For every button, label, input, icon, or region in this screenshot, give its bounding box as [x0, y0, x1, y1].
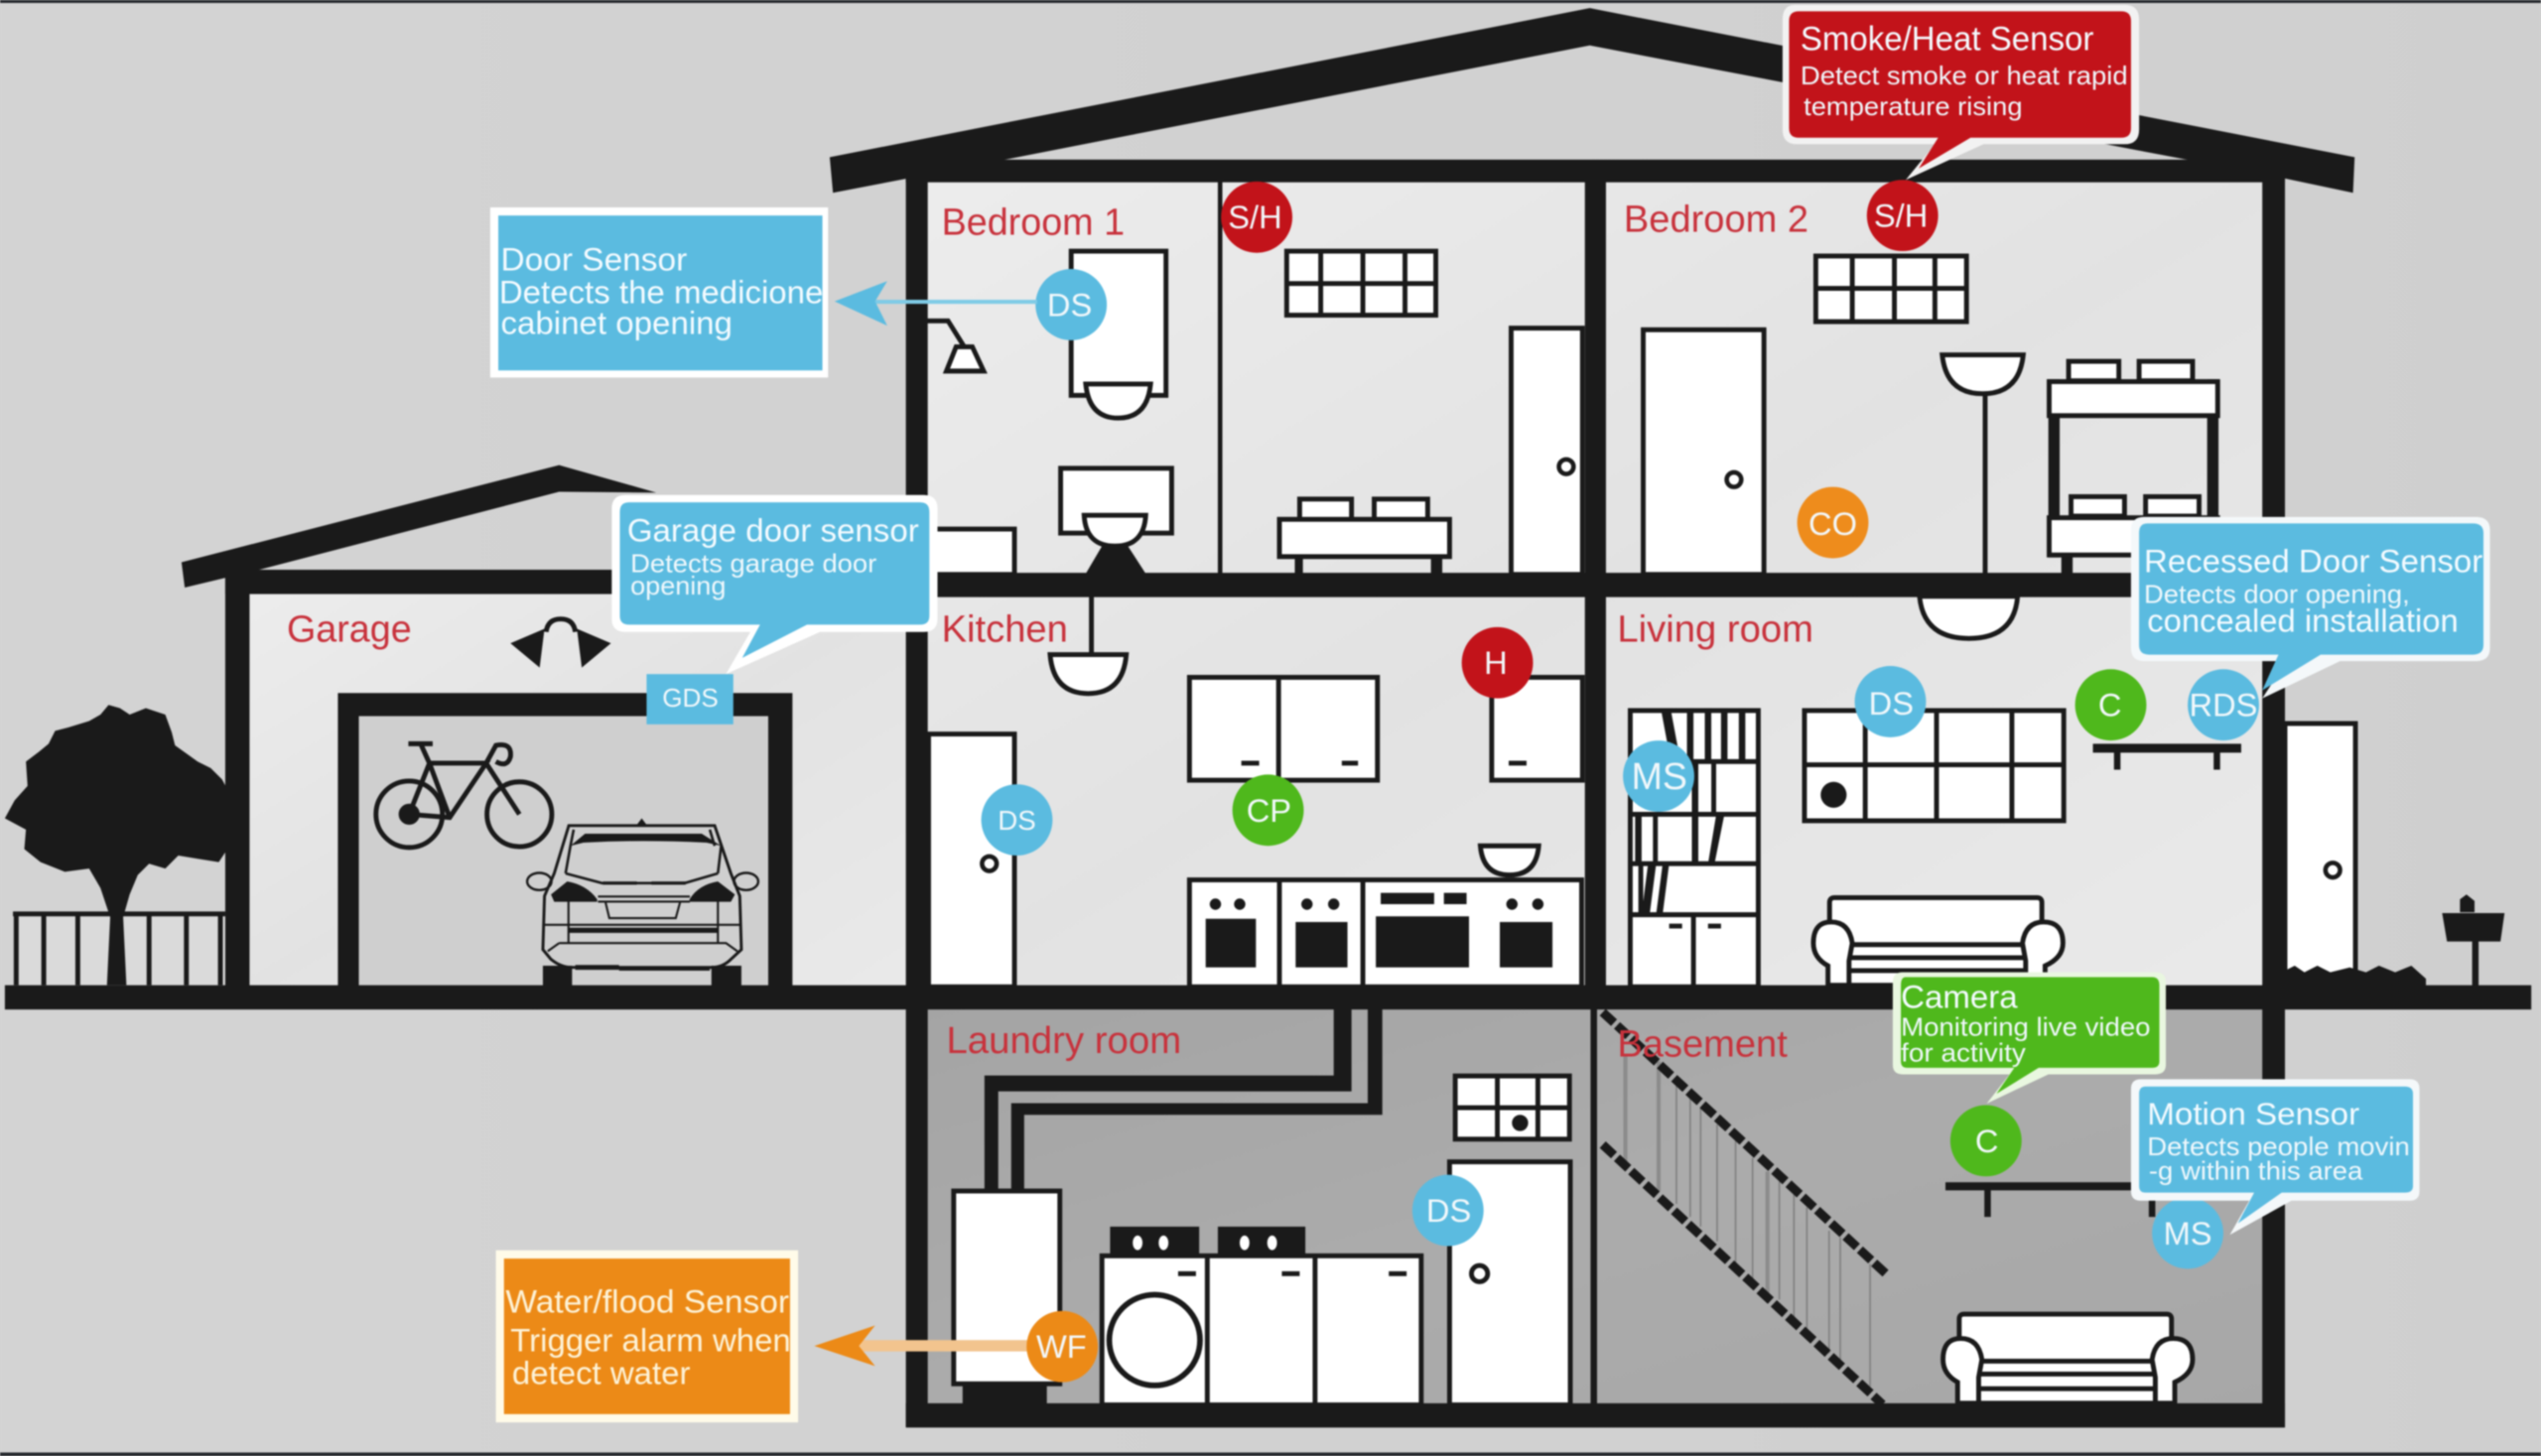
sensor: DS laundry [1412, 1175, 1484, 1247]
callout: motion sensor: Motion Sensor [2147, 1097, 2359, 1131]
sensor: C basement: C [1975, 1123, 1998, 1159]
counter and ovens [1189, 880, 1581, 987]
fence [13, 914, 225, 986]
room fills [249, 182, 2264, 1405]
basement [1603, 1012, 2193, 1404]
staircase [1603, 1012, 1888, 1404]
pendant lamp [1050, 596, 1127, 694]
callout: smoke/heat sensor: Smoke/Heat Sensor [1801, 21, 2093, 59]
callout: recessed door sensor [2131, 517, 2490, 699]
label: Bedroom 1: Bedroom 1 [942, 201, 1125, 243]
exterior door [2285, 724, 2355, 988]
ground line [5, 986, 2531, 1009]
bedroom 2 furniture [1644, 256, 2218, 575]
washer and cabinets [1102, 1227, 1421, 1405]
sensor: CO: CO [1808, 505, 1857, 542]
wall lamp [927, 321, 984, 371]
callout: garage door sensor: opening [630, 571, 726, 600]
bowl [1480, 846, 1538, 875]
floor lamp [1942, 355, 2023, 574]
label: Basement: Basement [1617, 1022, 1788, 1064]
right cabinet [1492, 677, 1582, 780]
wall shelf [2093, 743, 2241, 770]
sensor: GDS: GDS [662, 683, 719, 713]
sensor: S/H bedroom 1 [1221, 182, 1292, 253]
callout: smoke/heat sensor [1783, 5, 2139, 180]
basement sofa [1943, 1314, 2193, 1403]
arrow: water sensor [814, 1326, 1037, 1366]
label: Laundry room: Laundry room [946, 1019, 1181, 1061]
sensor: H [1462, 627, 1533, 699]
room labels [287, 198, 1813, 1064]
bunk bed [2049, 361, 2218, 574]
label: Kitchen: Kitchen [942, 608, 1068, 650]
sensor: MS living room: MS [1632, 755, 1687, 797]
callout: recessed door sensor: concealed installation [2147, 602, 2459, 639]
garage structure [182, 465, 922, 988]
sensor: C living room [2075, 669, 2146, 740]
callout: motion sensor [2131, 1079, 2420, 1235]
laundry door [1449, 1162, 1570, 1405]
callout: door sensor: Detects the medicione [499, 273, 823, 310]
callout: garage door sensor [611, 495, 937, 674]
bedroom 1 furniture [927, 251, 1582, 575]
callout: water/flood sensor: detect water [512, 1354, 691, 1390]
sensor: DS living room: DS [1869, 685, 1914, 722]
low bed [1279, 499, 1449, 574]
window [1815, 256, 1967, 322]
wall unit [1804, 710, 2065, 821]
sink cabinet [1061, 468, 1171, 574]
small counter [927, 529, 1014, 575]
callout: recessed door sensor: Detects door opening, [2144, 579, 2410, 608]
kitchen furniture [929, 596, 1582, 987]
sofa [1813, 897, 2063, 986]
sensor: C living room: C [2098, 687, 2122, 724]
callout: door sensor: cabinet opening [500, 304, 733, 340]
mailbox [2442, 894, 2504, 987]
sensor: DS kitchen: DS [998, 805, 1036, 836]
tree [5, 705, 236, 986]
sensor: DS bedroom 1: DS [1047, 286, 1092, 323]
callout: camera: Camera [1901, 979, 2019, 1015]
callout: recessed door sensor: Recessed Door Sensor [2144, 542, 2482, 579]
sensor: DS bedroom 1 [1035, 269, 1107, 340]
callout: garage door sensor: Detects garage door [630, 548, 877, 578]
laundry room [954, 1008, 1570, 1405]
callout: camera [1893, 973, 2166, 1104]
sensor: WF: WF [1036, 1328, 1087, 1365]
garage door opening [359, 717, 768, 987]
sensor: MS basement [2152, 1198, 2223, 1268]
label: Garage: Garage [287, 608, 412, 650]
arrow: door sensor [835, 281, 1037, 326]
sensor: S/H bedroom 1: S/H [1228, 199, 1282, 235]
callout: motion sensor: Detects people movin [2147, 1131, 2410, 1161]
closet door [1511, 329, 1582, 575]
pipes [985, 1008, 1383, 1191]
callout: garage door sensor: Garage door sensor [627, 511, 919, 548]
callout: smoke/heat sensor: temperature rising [1804, 91, 2023, 121]
sensor: MS living room [1623, 740, 1694, 812]
sensor: WF [1026, 1311, 1098, 1383]
callout: water/flood sensor: Water/flood Sensor [505, 1282, 789, 1319]
basement shelf [1945, 1182, 2155, 1217]
sensor: S/H bedroom 2 [1867, 180, 1939, 251]
sensor: RDS: RDS [2190, 687, 2257, 724]
label: Bedroom 2: Bedroom 2 [1624, 198, 1808, 239]
callout: water/flood sensor [496, 1251, 798, 1422]
bookshelf [1630, 710, 1758, 987]
car [527, 818, 758, 986]
sensor: S/H bedroom 2: S/H [1874, 198, 1928, 234]
callout: motion sensor: -g within this area [2149, 1156, 2363, 1186]
window [1286, 251, 1436, 316]
callout: camera: Monitoring live video [1901, 1011, 2151, 1041]
sensor: CO [1798, 487, 1868, 558]
sensor: C basement [1950, 1105, 2022, 1176]
door [1644, 330, 1764, 575]
sensor: GDS [646, 674, 734, 725]
callout: water/flood sensor: Trigger alarm when [510, 1322, 791, 1359]
label: Living room: Living room [1617, 608, 1813, 650]
sensor: DS laundry: DS [1426, 1192, 1471, 1229]
sensor: MS basement: MS [2164, 1215, 2212, 1252]
sensor: CP: CP [1247, 792, 1291, 829]
ceiling lamp [1920, 596, 2018, 638]
laundry window [1455, 1076, 1570, 1139]
callout: door sensor [490, 207, 828, 377]
sensor: CP [1233, 774, 1303, 846]
living room furniture [1630, 596, 2241, 987]
upper cabinet [1189, 677, 1378, 780]
bushes [2285, 966, 2426, 987]
callout: camera: for activity [1901, 1037, 2026, 1067]
sensor: RDS [2188, 669, 2259, 740]
bicycle [376, 743, 552, 848]
sensor: H: H [1484, 644, 1508, 681]
main house roof and walls [830, 8, 2354, 1427]
wardrobe [1071, 251, 1166, 418]
kitchen door [929, 734, 1014, 987]
garage lamp [510, 619, 611, 668]
sensor: DS living room [1855, 666, 1926, 737]
callout: door sensor: Door Sensor [500, 241, 687, 278]
water heater [954, 1191, 1060, 1405]
sensor: DS kitchen [982, 784, 1052, 856]
callout: smoke/heat sensor: Detect smoke or heat rapid [1801, 61, 2128, 90]
